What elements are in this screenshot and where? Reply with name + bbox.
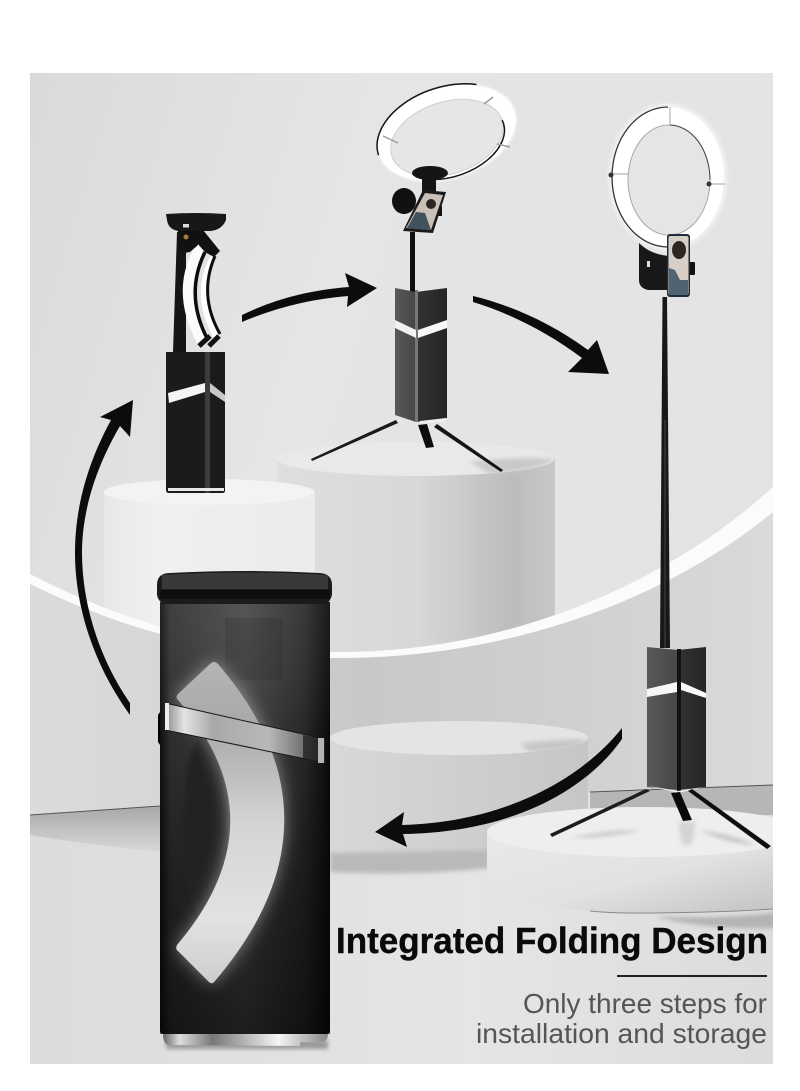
phone: [667, 234, 690, 297]
pedestal: left upper: [104, 479, 315, 626]
pole: [173, 232, 186, 352]
silver base: [163, 1034, 328, 1046]
box body: [166, 352, 225, 493]
arrow: step 3 to storage: [375, 728, 622, 847]
phone: [403, 190, 446, 233]
title: Integrated Folding Design: [336, 920, 768, 961]
head: [166, 213, 226, 231]
floor: [30, 785, 773, 1064]
product: folded unit with opened head: [166, 213, 226, 493]
chevron band: [395, 320, 416, 338]
head: [412, 166, 448, 180]
arrow: step 2 to step 3: [473, 296, 609, 374]
pedestal: lower middle: [330, 721, 588, 873]
case body: [160, 602, 330, 1034]
curved light segments: [178, 230, 220, 346]
ring light: [364, 67, 530, 199]
product: fully extended stand: [550, 104, 771, 849]
lower backdrop with white arc: [30, 487, 773, 812]
head: [639, 243, 670, 290]
arrow: storage to step 1: [75, 400, 133, 715]
lid: [157, 571, 332, 604]
chevron band: [168, 383, 205, 403]
tripod legs: [550, 789, 650, 837]
telescopic pole: [660, 297, 670, 648]
glowing folded light segment: [176, 662, 284, 983]
arrow: step 1 to step 2: [242, 273, 377, 322]
box: [647, 647, 678, 790]
chevron band: [647, 682, 677, 697]
pedestal: middle upper: [307, 458, 555, 652]
caption: installation and storage: [476, 1018, 767, 1049]
caption: [476, 988, 767, 1049]
caption: Only three steps for: [523, 988, 767, 1019]
tripod legs: [311, 420, 398, 461]
ring light: [608, 104, 727, 250]
divider rule: [617, 975, 767, 977]
pole: [410, 232, 415, 292]
case shadow: [166, 1040, 328, 1049]
pedestal: lower right: [487, 807, 800, 928]
product: large see-through storage case: [157, 571, 332, 1049]
product: half-extended stand: [311, 67, 530, 472]
silver band: [158, 703, 325, 763]
box: [395, 288, 416, 422]
inner dark shape: [183, 733, 227, 917]
